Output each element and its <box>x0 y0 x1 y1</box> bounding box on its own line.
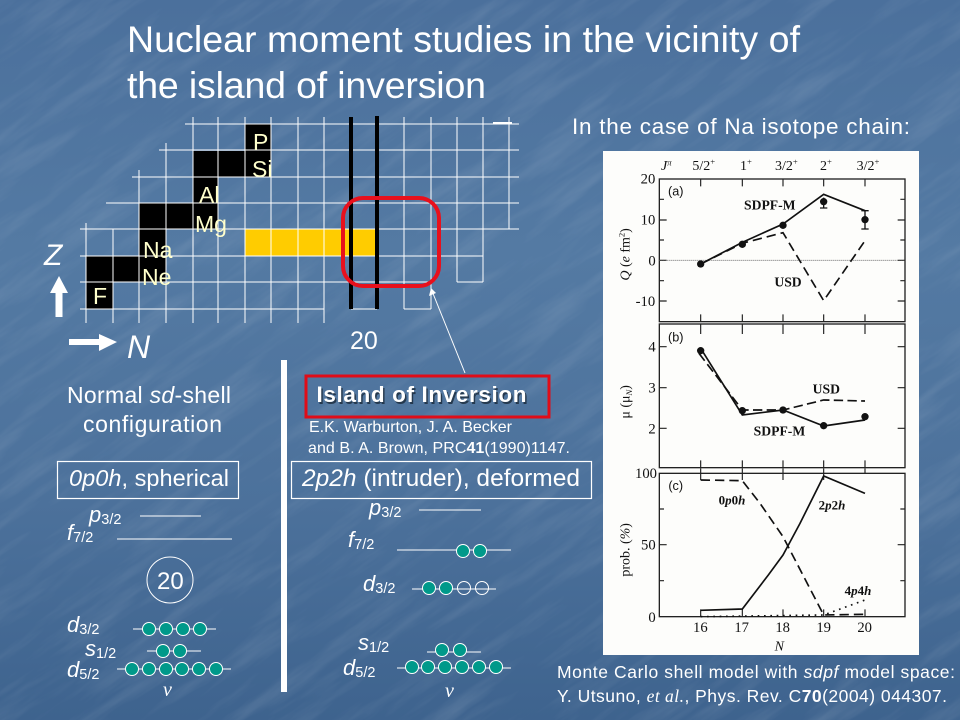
title: the island of inversion <box>127 64 486 106</box>
chart b: magnetic moment: ) <box>618 385 633 390</box>
chart a: quadrupole moment: J <box>661 159 667 174</box>
shell gap 20: 20 <box>157 568 184 595</box>
level labels: 3/2 <box>79 622 99 638</box>
chart a: quadrupole moment: USD <box>774 275 802 290</box>
level labels: s <box>85 636 96 661</box>
arrow right <box>69 334 117 351</box>
chart a: quadrupole moment: -10 <box>636 294 655 310</box>
chart a: quadrupole moment: 0 <box>648 253 656 269</box>
axis label N: N <box>127 329 151 365</box>
chart b: magnetic moment: 3 <box>648 381 656 397</box>
chart a: quadrupole moment: 1 <box>740 159 747 174</box>
chart a: quadrupole moment: 20 <box>641 172 655 188</box>
chart a: quadrupole moment: + <box>875 157 880 167</box>
arrow to island <box>429 288 465 373</box>
chart a: quadrupole moment: (a) <box>668 185 683 199</box>
chart b: magnetic moment: (b) <box>668 330 683 344</box>
level labels: 7/2 <box>73 530 93 546</box>
title: Nuclear moment studies in the vicinity of <box>127 18 801 60</box>
level labels <box>67 502 121 683</box>
chart c: configuration probability: prob. (%) <box>618 523 633 577</box>
normal configuration text: Normal sd-shell <box>67 382 231 408</box>
element labels: Mg <box>195 211 227 237</box>
level labels: p <box>89 502 101 527</box>
normal configuration text: configuration <box>83 411 222 437</box>
chart a: quadrupole moment: 3/2 <box>775 159 793 174</box>
element labels: F <box>93 283 107 309</box>
chart c: configuration probability: N <box>774 640 785 655</box>
element labels: P <box>253 129 268 155</box>
nu label: ν <box>163 679 172 701</box>
island highlight <box>343 198 439 286</box>
chart b: magnetic moment <box>618 324 905 468</box>
chart a: quadrupole moment: + <box>793 157 798 167</box>
level labels: 1/2 <box>96 646 116 662</box>
chart a: quadrupole moment: + <box>747 157 752 167</box>
level labels: 7/2 <box>354 537 374 553</box>
nu label: ν <box>445 680 454 702</box>
box: 2p2h deformed: 2p2h (intruder), deformed <box>301 465 580 492</box>
arrow up <box>50 276 68 317</box>
nucleons <box>126 622 222 676</box>
level labels: 5/2 <box>355 665 375 681</box>
island of inversion box: Island of Inversion <box>318 384 528 409</box>
chart a: quadrupole moment: Q (e fm <box>618 237 633 281</box>
chart c: configuration probability: 2p2h <box>819 497 845 512</box>
yellow cell band <box>245 229 375 256</box>
chart b: magnetic moment: USD <box>813 382 840 397</box>
normal configuration text <box>67 382 231 437</box>
chart c: configuration probability: 50 <box>641 538 656 554</box>
level labels <box>343 495 401 681</box>
element labels: Al <box>199 182 219 208</box>
box: 0p0h spherical: 0p0h, spherical <box>69 465 229 491</box>
level labels: p <box>369 495 381 520</box>
chart c: configuration probability: 0p0h <box>719 492 745 507</box>
chart a: quadrupole moment: π <box>667 157 672 167</box>
reference Warburton <box>308 419 570 457</box>
element labels <box>93 129 272 309</box>
level labels: s <box>358 630 369 655</box>
element labels: Na <box>143 237 173 263</box>
nucleons <box>406 544 502 674</box>
box: 0p0h spherical <box>58 462 238 498</box>
chart a: quadrupole moment <box>617 157 905 322</box>
chart a: quadrupole moment: ) <box>618 228 633 233</box>
chart a: quadrupole moment: 3/2 <box>857 159 875 174</box>
level labels: 5/2 <box>79 667 99 683</box>
island of inversion box: Island of Inversion <box>316 382 526 407</box>
chart b: magnetic moment: SDPF-M <box>754 423 805 438</box>
chart b: magnetic moment: μ (μ <box>618 396 633 419</box>
left level scheme <box>67 502 232 701</box>
chart a: quadrupole moment: 2 <box>617 233 627 237</box>
chart c: configuration probability: 20 <box>857 620 872 636</box>
chart c: configuration probability: 16 <box>693 620 708 636</box>
nuclear chart grid <box>80 116 519 323</box>
chart b: magnetic moment: 2 <box>648 421 656 437</box>
box: 2p2h deformed <box>292 462 592 498</box>
title <box>127 18 801 106</box>
chart c: configuration probability: 4p4h <box>845 583 871 598</box>
chart c: configuration probability: 18 <box>775 620 790 636</box>
label 20: 20 <box>350 327 378 355</box>
reference Utsuno: Y. Utsuno, et al., Phys. Rev. C70(2004) 044307. <box>557 686 947 706</box>
level labels: 3/2 <box>381 505 401 521</box>
chart a: quadrupole moment: SDPF-M <box>744 198 796 213</box>
right level scheme <box>343 495 511 702</box>
chart a: quadrupole moment: 10 <box>641 213 655 229</box>
level labels: f <box>67 520 73 545</box>
level labels: 3/2 <box>101 512 121 528</box>
reference Warburton: and B. A. Brown, PRC41(1990)1147. <box>308 440 570 457</box>
chart a: quadrupole moment: 5/2 <box>692 159 710 174</box>
level labels: d <box>343 655 355 680</box>
chart c: configuration probability <box>618 466 905 655</box>
chart c: configuration probability: 19 <box>816 620 831 636</box>
reference Utsuno <box>557 662 955 706</box>
chart b: magnetic moment: N <box>624 389 634 397</box>
chart c: configuration probability: 100 <box>635 466 657 482</box>
chart c: configuration probability: (c) <box>668 479 683 493</box>
island of inversion box <box>306 376 549 417</box>
panel: plot figure <box>603 151 919 655</box>
chart b: magnetic moment: 4 <box>648 340 656 356</box>
magic number lines N=20 <box>351 116 377 309</box>
level labels: 3/2 <box>375 581 395 597</box>
chart a: quadrupole moment: + <box>827 157 832 167</box>
in-case caption: In the case of Na isotope chain: <box>572 114 910 139</box>
element labels: Si <box>252 156 272 182</box>
shell gap 20 <box>147 557 193 603</box>
reference Utsuno: Monte Carlo shell model with sdpf model space: <box>557 662 955 682</box>
axis label Z: Z <box>43 239 64 272</box>
chart c: configuration probability: 0 <box>648 610 656 626</box>
divider bar <box>281 360 287 692</box>
level labels: d <box>67 657 79 682</box>
black cells: stable isotopes <box>86 124 271 309</box>
chart c: configuration probability: 17 <box>734 620 749 636</box>
level labels: 1/2 <box>369 640 389 656</box>
level labels: f <box>348 527 354 552</box>
reference Warburton: E.K. Warburton, J. A. Becker <box>309 419 513 436</box>
level labels: d <box>67 612 79 637</box>
chart a: quadrupole moment: 2 <box>820 159 827 174</box>
level labels: d <box>363 571 375 596</box>
chart a: quadrupole moment: + <box>710 157 715 167</box>
element labels: Ne <box>142 264 171 290</box>
